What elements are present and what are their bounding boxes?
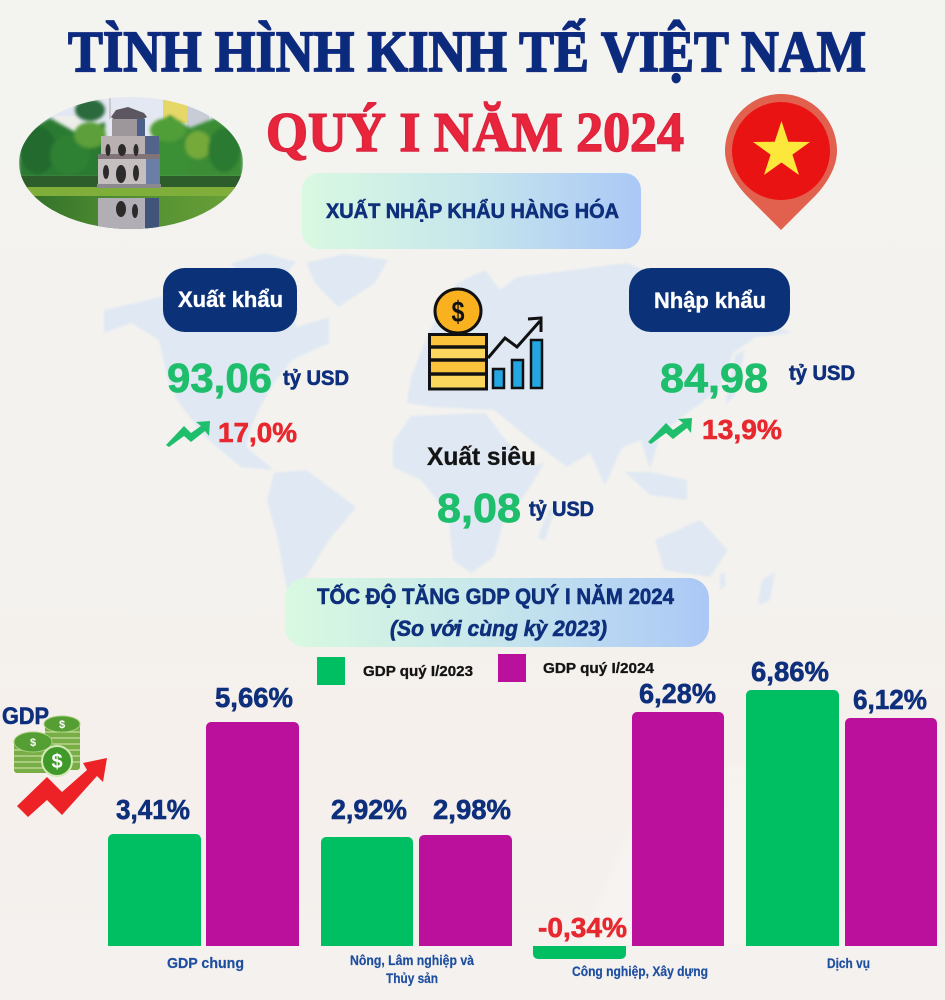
export unit: tỷ USD	[283, 367, 349, 390]
export label pill	[163, 268, 297, 332]
panel: GDP heading: (So với cùng kỳ 2023)	[390, 616, 607, 641]
title	[68, 19, 866, 164]
title line 1: TÌNH HÌNH KINH TẾ VIỆT NAM	[68, 19, 866, 84]
group: Nông, Lâm nghiệp và Thủy sản: 2,92%	[331, 794, 407, 825]
group: Nông, Lâm nghiệp và Thủy sản	[321, 794, 512, 986]
legend item 2023: GDP quý I/2023	[363, 663, 473, 680]
legend item 2024	[498, 654, 655, 682]
coin stacks: $	[30, 737, 36, 749]
panel: GDP heading: TỐC ĐỘ TĂNG GDP QUÝ I NĂM 2024	[317, 583, 675, 609]
GDP text: GDP	[2, 703, 49, 730]
surplus unit: tỷ USD	[529, 498, 594, 521]
photo tower	[97, 97, 161, 229]
coin stacks: $	[51, 751, 63, 773]
title line 2: QUÝ I NĂM 2024	[266, 101, 684, 164]
group: GDP chung: 3,41%	[116, 794, 190, 825]
import value: 84,98	[660, 355, 768, 401]
icon: coins and growth chart: $	[452, 296, 465, 329]
panel: imports	[629, 268, 855, 445]
icon: coins and growth chart	[429, 289, 542, 389]
icon: green up arrow	[648, 418, 692, 444]
group: Dịch vụ: 6,86%	[751, 656, 829, 687]
group: GDP chung: GDP chung	[167, 955, 244, 972]
group: GDP chung: 5,66%	[215, 682, 293, 713]
group: Công nghiệp, Xây dựng: -0,34%	[538, 912, 627, 943]
group: Nông, Lâm nghiệp và Thủy sản: Nông, Lâm nghiệp và	[350, 953, 474, 968]
panel: trade heading: XUẤT NHẬP KHẨU HÀNG HÓA	[326, 199, 619, 223]
group: GDP chung	[108, 682, 299, 972]
group: Công nghiệp, Xây dựng	[533, 678, 724, 979]
legend item 2024: GDP quý I/2024	[543, 660, 655, 677]
import label pill: Nhập khẩu	[654, 288, 766, 313]
import unit: tỷ USD	[789, 362, 855, 385]
icon: GDP money and red arrow	[2, 703, 107, 817]
panel: trade heading	[302, 173, 641, 249]
group: Công nghiệp, Xây dựng: Công nghiệp, Xây dựng	[572, 964, 708, 979]
group: Công nghiệp, Xây dựng: 6,28%	[639, 678, 716, 709]
world map background	[104, 253, 792, 605]
panel: GDP heading	[285, 578, 709, 647]
export growth: 17,0%	[218, 417, 297, 448]
faint background swoosh	[580, 760, 760, 945]
bar chart	[108, 656, 937, 986]
photo: Turtle Tower, Hanoi	[19, 97, 243, 229]
group: Dịch vụ: Dịch vụ	[827, 956, 870, 971]
group: Dịch vụ	[746, 656, 937, 971]
surplus value: 8,08	[437, 485, 521, 531]
export value: 93,06	[167, 355, 272, 401]
group: Nông, Lâm nghiệp và Thủy sản: Thủy sản	[386, 971, 438, 986]
red arrow	[17, 758, 107, 817]
import growth: 13,9%	[702, 414, 782, 445]
group: Dịch vụ: 6,12%	[853, 684, 927, 715]
icon: green up arrow	[166, 421, 210, 447]
panel: trade surplus	[427, 443, 594, 531]
import label pill	[629, 268, 790, 332]
export label pill: Xuất khẩu	[178, 287, 283, 312]
legend	[317, 654, 655, 685]
coin stacks	[14, 716, 80, 776]
legend item 2023	[317, 657, 473, 685]
surplus label: Xuất siêu	[427, 443, 536, 471]
coin stacks: $	[59, 719, 65, 731]
icon: location pin with Vietnam flag	[725, 94, 837, 230]
group: Nông, Lâm nghiệp và Thủy sản: 2,98%	[433, 794, 511, 825]
panel: exports	[163, 268, 349, 448]
